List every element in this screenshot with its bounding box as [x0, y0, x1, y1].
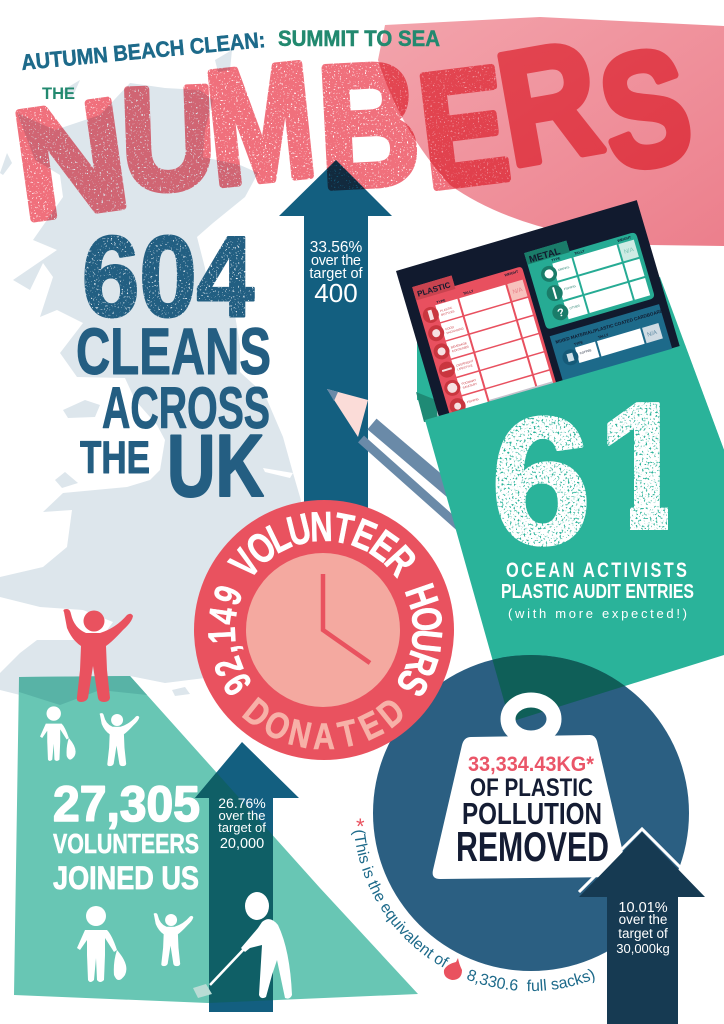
text: volunteer hours: E	[346, 509, 383, 560]
panel: plastic weight circle	[373, 655, 689, 971]
text: 92,149	[201, 580, 260, 702]
text: volunteer hours	[220, 503, 451, 704]
stat: 604 cleans across the UK: THE	[80, 432, 150, 483]
arrow: cleans target	[279, 160, 392, 520]
heading: numbers: R	[486, 7, 612, 200]
text: plastic removed amount: POLLUTION	[462, 796, 602, 831]
text: plastic removed amount	[456, 753, 609, 870]
arrow label: 26.76%	[218, 795, 266, 852]
text: donated: E	[353, 703, 389, 749]
text: 92,149: 9	[216, 665, 260, 702]
arrow label: 26.76%: over the	[219, 808, 265, 823]
form section: plastic: BEVERAGE	[450, 341, 467, 350]
text: plastic removed amount: 33,334.43KG*	[468, 753, 595, 776]
panel: audit envelope back	[416, 277, 724, 450]
text: donated: A	[313, 716, 335, 758]
text: 92,149: 2	[206, 651, 252, 682]
stat: 61: 1	[598, 366, 688, 567]
text: volunteer hours: R	[396, 645, 447, 682]
text: ocean activists plastic audit entries	[501, 558, 694, 621]
text: donated: D	[370, 690, 413, 736]
form section: mixed material: N/A	[647, 330, 658, 339]
form section: plastic: OVERNIGHT	[456, 359, 474, 368]
stat: 61: 6	[491, 381, 591, 582]
text: plastic removed amount: REMOVED	[456, 823, 609, 870]
form section: plastic: FISHING	[466, 397, 480, 404]
arrow label: 33.56%: target of	[309, 266, 364, 282]
text: donated	[235, 690, 413, 758]
stat: 27,305 volunteers joined us: 27,305	[53, 776, 200, 832]
text: 92,149: 1	[201, 626, 245, 645]
text: 92,149: 4	[201, 605, 246, 627]
form section: metal: DRINKS	[558, 265, 570, 272]
form section: plastic: WEIGHT	[504, 269, 520, 277]
arrow: plastic target	[579, 829, 705, 1024]
stat: 604 cleans across the UK: 604	[82, 214, 254, 341]
arrow label: 10.01%: 30,000kg	[616, 941, 670, 956]
map of the UK	[0, 50, 310, 700]
arrow label: 10.01%: over the	[619, 912, 667, 927]
arrow label: 33.56%	[309, 239, 364, 308]
form section: plastic: BOTTLES	[441, 309, 455, 317]
heading: the: THE	[42, 84, 75, 103]
form section: plastic: PACKAGING	[446, 326, 465, 335]
text: volunteer hours: S	[387, 662, 438, 704]
form section: plastic: TYPE	[436, 298, 447, 305]
text: donated: N	[285, 712, 315, 757]
stat: 61	[496, 402, 668, 547]
form section: plastic: SANITARY	[462, 382, 477, 390]
arrow label: 26.76%: 26.76%	[218, 795, 266, 811]
panel: volunteer hours clock	[194, 500, 454, 760]
form section: plastic: PLASTIC	[440, 305, 453, 313]
panel: audit envelope front	[425, 345, 724, 722]
icon: clock hands	[323, 574, 370, 663]
icon: sack	[444, 958, 462, 980]
form section: metal: TYPE	[551, 256, 561, 263]
heading: numbers: E	[410, 32, 517, 222]
text: volunteer hours: N	[309, 503, 333, 550]
stat: 27,305 volunteers joined us: VOLUNTEERS	[53, 828, 199, 859]
form section: metal: N/A	[623, 247, 635, 256]
text: 92,149: ,	[203, 643, 247, 660]
form section: plastic	[412, 256, 561, 431]
text: plastic removed amount: OF PLASTIC	[470, 774, 593, 802]
form section: metal: FISHING	[563, 284, 577, 291]
icon: weight with plastic text	[433, 700, 627, 879]
text: volunteer hours: E	[362, 521, 406, 571]
heading: numbers: B	[314, 28, 423, 224]
arrow: volunteers target	[195, 742, 299, 1012]
text: volunteer hours: O	[402, 605, 451, 634]
text: volunteer hours: H	[396, 578, 447, 615]
form section: plastic: N/A	[512, 287, 523, 296]
stat: 604 cleans across the UK: UK	[167, 416, 264, 515]
stat: 27,305 volunteers joined us	[53, 776, 200, 896]
text: donated: T	[334, 712, 362, 757]
form section: metal	[524, 221, 655, 330]
heading: numbers: S	[588, 14, 703, 205]
arrow label: 10.01%: target of	[618, 926, 668, 941]
pink blob	[378, 17, 724, 246]
text: volunteer hours: L	[260, 512, 298, 562]
form section: plastic: FOOD	[445, 325, 455, 331]
arrow label: 26.76%: 20,000	[220, 836, 264, 852]
form section: plastic: FOODWAY	[461, 378, 477, 386]
figure: volunteer cheering, top	[100, 713, 139, 766]
arrow label: 26.76%: target of	[218, 820, 266, 835]
heading: event title	[20, 26, 440, 75]
arrow label: 33.56%: 400	[314, 278, 358, 308]
arrow label: 10.01%: 10.01%	[618, 900, 668, 916]
form section: metal: WEIGHT	[617, 235, 632, 243]
figure: red person on summit	[63, 609, 133, 702]
audit form card	[396, 200, 685, 434]
footnote: equivalent in sacks: (This is the equivalent of	[350, 830, 450, 968]
arrow label: 33.56%: 33.56%	[310, 239, 362, 256]
stat: 604 cleans across the UK: ACROSS	[102, 376, 270, 441]
stat: 27,305 volunteers joined us: JOINED US	[53, 860, 199, 896]
form section: plastic: TALLY	[463, 289, 475, 296]
form section: mixed material: TYPE	[573, 340, 584, 347]
text: volunteer hours: R	[376, 537, 426, 585]
form section: metal: METAL	[528, 246, 562, 266]
form section: metal: TALLY	[574, 249, 586, 256]
stat: 604 cleans across the UK	[76, 214, 271, 515]
figure: volunteer with bag, top	[40, 706, 76, 761]
footnote: equivalent in sacks	[350, 814, 595, 992]
text: 92,149: 9	[206, 580, 252, 610]
figure: volunteer cheering, bottom	[154, 913, 193, 966]
text: volunteer hours: V	[220, 541, 270, 587]
form section: mixed material: MIXED MATERIAL/PLASTIC COATED CARDBOARD	[555, 308, 664, 345]
form section: plastic: LIFESTYLE	[457, 363, 473, 372]
icon: pencil	[327, 389, 480, 545]
text: volunteer hours: U	[402, 627, 451, 654]
footnote: equivalent in sacks: 8,330.6 full sacks)	[467, 968, 595, 992]
text: volunteer hours: U	[283, 505, 316, 555]
figure: litter picker	[193, 892, 292, 999]
footnote: equivalent in sacks: *	[356, 814, 365, 839]
arrow label: 33.56%: over the	[311, 253, 361, 269]
heading: event title: SUMMIT TO SEA	[278, 26, 440, 51]
form section: mixed material: COFFEE	[579, 348, 592, 355]
text: volunteer hours: T	[330, 504, 358, 553]
form section: mixed material	[550, 303, 678, 393]
arrow label: 10.01%	[616, 900, 670, 956]
form section: metal: OTHER	[569, 303, 581, 310]
panel: volunteers hill	[14, 676, 418, 1003]
form section: plastic: CONTAINER	[451, 344, 470, 353]
form section: plastic: PLASTIC	[416, 280, 452, 299]
heading: numbers: N	[4, 66, 137, 253]
form section: mixed material: TALLY	[597, 333, 610, 340]
form section: metal: ?	[556, 306, 566, 320]
heading: numbers	[4, 7, 703, 253]
text: volunteer hours: O	[237, 522, 285, 574]
text: ocean activists plastic audit entries: OCEAN ACTIVISTS	[506, 558, 687, 581]
heading: event title: AUTUMN BEACH CLEAN:	[20, 27, 266, 75]
heading: numbers: U	[118, 56, 218, 222]
figure: volunteer with bag, bottom	[77, 906, 126, 982]
heading: numbers: M	[199, 28, 323, 219]
text: donated: D	[235, 690, 278, 736]
text: donated: O	[257, 702, 297, 750]
text: ocean activists plastic audit entries: (with more expected!)	[508, 606, 687, 621]
stat: 604 cleans across the UK: CLEANS	[76, 314, 271, 388]
